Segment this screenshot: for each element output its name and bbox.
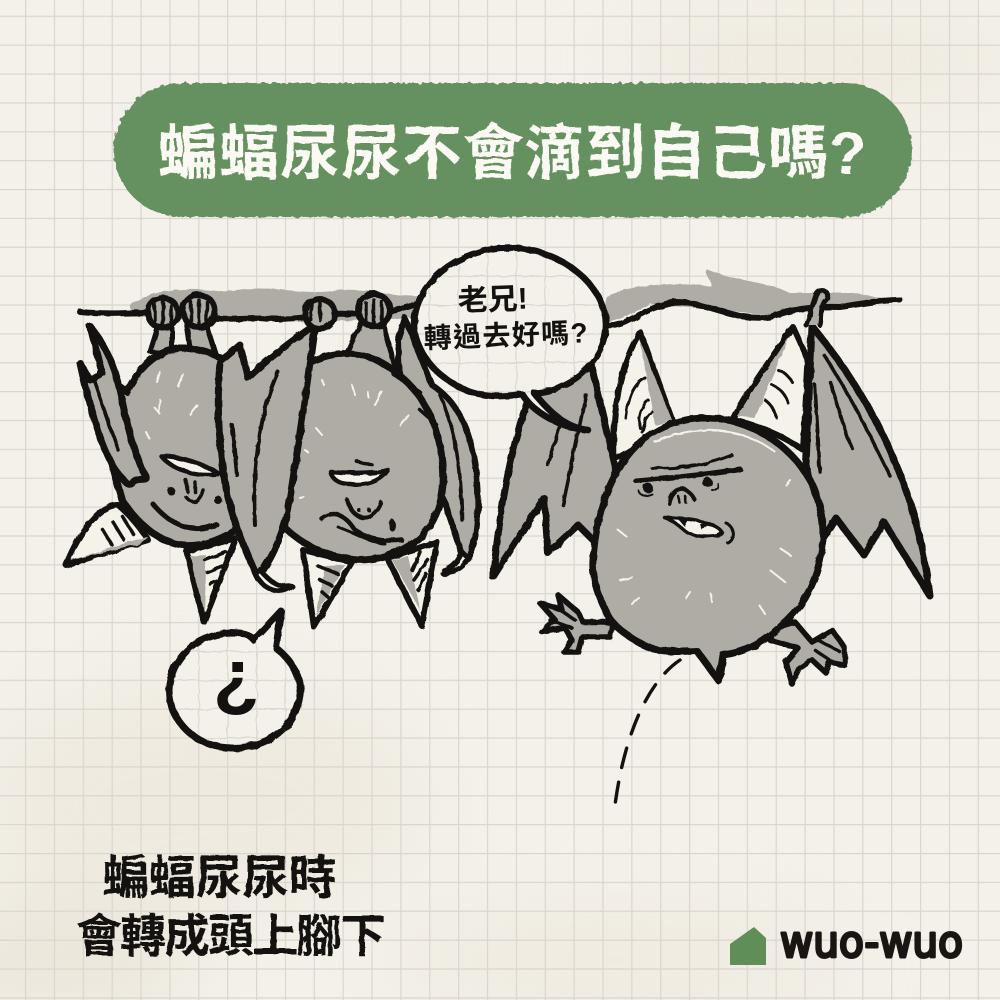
icon: house: [730, 927, 766, 965]
body: [90, 348, 250, 546]
brand wordmark: wuo-wuo: [780, 917, 963, 968]
body: [593, 418, 823, 681]
right ear: [733, 327, 808, 450]
left bat: [66, 295, 250, 622]
pee dashed line: [615, 660, 680, 805]
arms and hands: [346, 320, 398, 378]
left wing: [493, 360, 618, 577]
arms and hands: [150, 318, 216, 356]
speech bubble: question: [169, 611, 300, 748]
ear: left bat lower ear: [66, 505, 148, 565]
title banner: [114, 83, 912, 217]
logo: [730, 917, 963, 968]
inverted question mark: ¿: [213, 634, 259, 719]
right wing: [806, 326, 930, 596]
title text: 蝙蝠尿尿不會滴到自己嗎?: [158, 120, 866, 187]
bubble text second line: 轉過去好嗎?: [423, 317, 588, 354]
foot hook: [806, 291, 828, 325]
right foot: [770, 622, 845, 684]
snout: [669, 489, 695, 503]
wing: [80, 326, 146, 484]
eyes: [643, 483, 653, 493]
right bat: [493, 291, 930, 684]
left ear: [614, 332, 673, 460]
face: [331, 470, 388, 484]
left foot: [540, 595, 612, 652]
hook claw: [444, 552, 468, 571]
caption: 會轉成頭上腳下: [76, 910, 386, 962]
cover wing: [218, 325, 315, 578]
caption: [76, 851, 386, 962]
far wing: [398, 318, 478, 574]
bubble text: 老兄!: [457, 283, 528, 318]
body: [285, 354, 443, 560]
branch: [80, 270, 900, 326]
ear: left bat bottom ear: [187, 538, 236, 622]
speech bubble: brother: [414, 248, 606, 430]
middle bat: [218, 294, 478, 627]
hand on wing: [305, 299, 335, 329]
face: [161, 456, 219, 474]
feet: [303, 550, 352, 627]
wing claw: [256, 570, 292, 591]
brow: [636, 469, 740, 481]
caption: 蝙蝠尿尿時: [102, 851, 336, 904]
mouth: [665, 518, 722, 537]
